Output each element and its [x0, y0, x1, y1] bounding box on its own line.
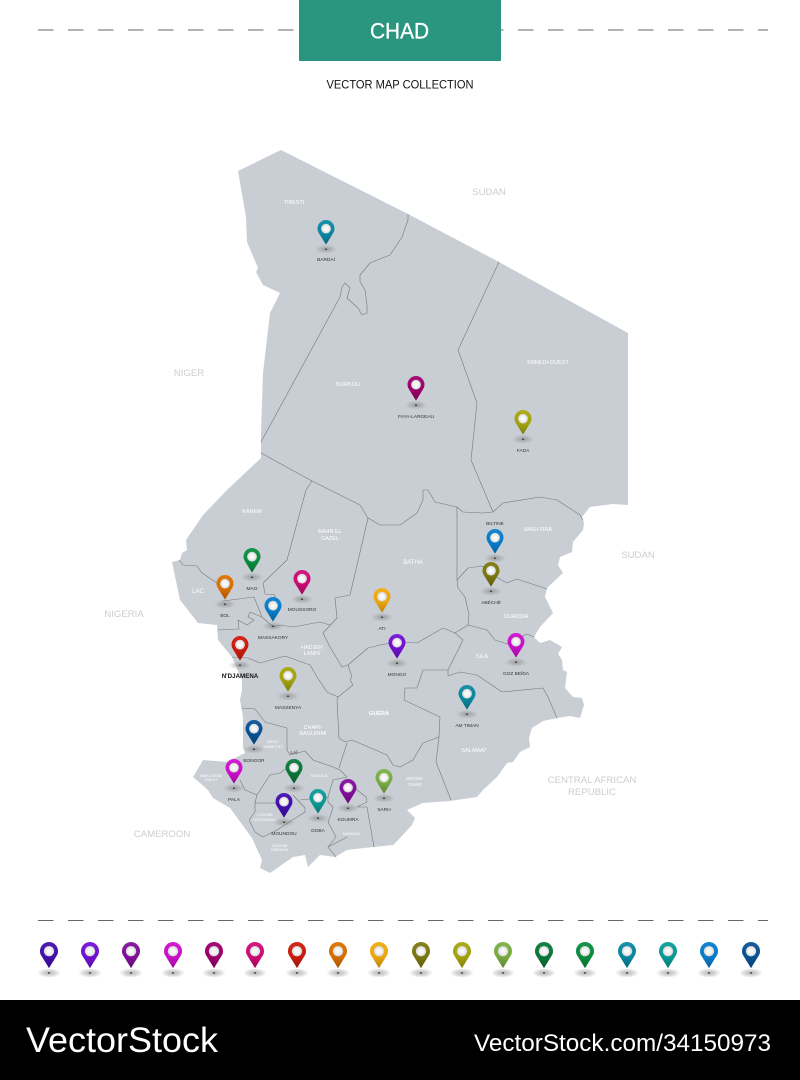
pin: N'Djamena: N'DJAMENA: [222, 673, 259, 680]
region name labels: WADI FIRA: [524, 527, 552, 533]
pin: Laï: [282, 749, 306, 793]
pin: Bardaï: BARDAÍ: [317, 256, 336, 263]
bottom dashed line: [38, 920, 768, 922]
region name labels: MOYEN-: [406, 776, 424, 781]
top dashed line: [38, 29, 768, 31]
region name labels: KANEM: [242, 509, 262, 515]
region name labels: CHARI-: [304, 725, 323, 731]
pin: N'Djamena: [222, 636, 259, 680]
pin: Massakory: MASSAKORY: [258, 635, 289, 641]
region name labels: SILA: [476, 654, 488, 660]
region name labels: ORIENTAL: [271, 848, 289, 852]
pin: Ati: [370, 588, 394, 632]
region name labels: LOGONE: [272, 844, 288, 848]
subtitle: VECTOR MAP COLLECTION: [326, 78, 474, 91]
region name labels: BAHR EL: [318, 529, 342, 535]
pin: Am Timan: AM TIMAN: [455, 723, 479, 729]
pin: Koumra: [336, 779, 360, 823]
pin: Moussoro: [288, 570, 317, 613]
pin: Sarh: SARH: [377, 807, 391, 813]
region name labels: GAZEL: [321, 536, 339, 542]
region name labels: LAC: [192, 589, 205, 595]
pin: Biltine: [484, 521, 506, 563]
title banner: CHAD: [370, 18, 429, 44]
legend: row of coloured pins: [37, 942, 763, 978]
region name labels: HADJER: [301, 645, 323, 651]
pin: Goz Beïda: [503, 633, 530, 677]
region name labels: BAGUIRMI: [299, 731, 327, 737]
region name labels: GUÉRA: [369, 709, 389, 717]
neighbouring country labels: CENTRAL AFRICAN: [548, 775, 636, 786]
neighbouring country labels: NIGER: [174, 368, 204, 379]
pin: Moussoro: MOUSSORO: [288, 607, 317, 613]
map land shape: [172, 150, 628, 873]
pin: Biltine: BILTINE: [486, 521, 504, 527]
footer bar: [0, 1000, 800, 1080]
pin: Doba: [306, 789, 330, 834]
region name labels: OUADDAÏ: [503, 613, 529, 620]
pin: Mongo: [386, 634, 408, 678]
neighbouring country labels: SUDAN: [472, 187, 506, 198]
pin: Faya-Largeau: [398, 376, 435, 420]
pin: Koumra: KOUMRA: [337, 817, 359, 823]
neighbouring country labels: NIGERIA: [104, 609, 144, 620]
pin: Doba: DOBA: [311, 828, 326, 834]
region name labels: LAMIS: [304, 651, 321, 657]
pin: Mongo: MONGO: [388, 672, 407, 678]
pin: Bardaï: [314, 220, 338, 263]
neighbouring country labels: [104, 187, 655, 840]
region name labels: MAYO-: [267, 740, 280, 744]
region name labels: TIBESTI: [284, 200, 305, 206]
region name labels: [192, 200, 569, 852]
pin: Laï: LAÏ: [290, 749, 298, 756]
pin: Ati: ATI: [378, 626, 386, 632]
pin: Abéché: [480, 562, 502, 606]
title banner: [299, 0, 501, 61]
region name labels: MANDOUL: [343, 832, 361, 836]
footer brand: VectorStock: [26, 1021, 219, 1060]
pin: Abéché: ABÉCHÉ: [481, 599, 501, 606]
pin: Mao: MAO: [247, 586, 258, 592]
pin: Bongor: BONGOR: [243, 758, 265, 764]
pin: Am Timan: [455, 685, 479, 729]
pin: Fada: FADA: [517, 448, 530, 454]
pin: Faya-Largeau: FAYA-LARGEAU: [398, 414, 435, 420]
map of Chad: [172, 150, 628, 873]
region name labels: TANDJILÉ: [310, 773, 328, 778]
pin: Moundou: MOUNDOU: [271, 831, 297, 837]
pin: Pala: PALA: [228, 797, 241, 803]
region name labels: OUEST: [205, 778, 218, 782]
neighbouring country labels: REPUBLIC: [568, 787, 616, 798]
pin: Massenya: [275, 667, 302, 711]
pin: Sarh: [372, 769, 396, 813]
neighbouring country labels: SUDAN: [621, 550, 655, 561]
pin: Mao: [240, 548, 264, 592]
pin: Massakory: [258, 597, 289, 641]
region name labels: SALAMAT: [461, 748, 487, 754]
pin: Goz Beïda: GOZ BEÏDA: [503, 670, 530, 677]
region name labels: CHARI: [408, 782, 422, 787]
pin: Bol: BOL: [220, 613, 230, 619]
region name labels: KEBBI EST: [263, 745, 283, 749]
neighbouring country labels: CAMEROON: [134, 829, 190, 840]
pin: Fada: [512, 410, 534, 454]
region name labels: MAYO-KEBBI: [200, 774, 222, 778]
pin: Bol: [214, 575, 236, 619]
region name labels: OCCIDENTAL: [253, 818, 277, 822]
footer url: VectorStock.com/34150973: [474, 1030, 771, 1057]
pin: Bongor: [242, 720, 266, 764]
region name labels: BORKOU: [336, 382, 360, 388]
region name labels: ENNEDI-OUEST: [527, 360, 569, 366]
pin: Pala: [222, 759, 246, 803]
region borders: [179, 214, 583, 857]
region name labels: BATHA: [403, 560, 423, 566]
pin: Moundou: [271, 793, 297, 837]
pin: Massenya: MASSENYA: [275, 705, 302, 711]
region name labels: LOGONE: [257, 813, 273, 817]
